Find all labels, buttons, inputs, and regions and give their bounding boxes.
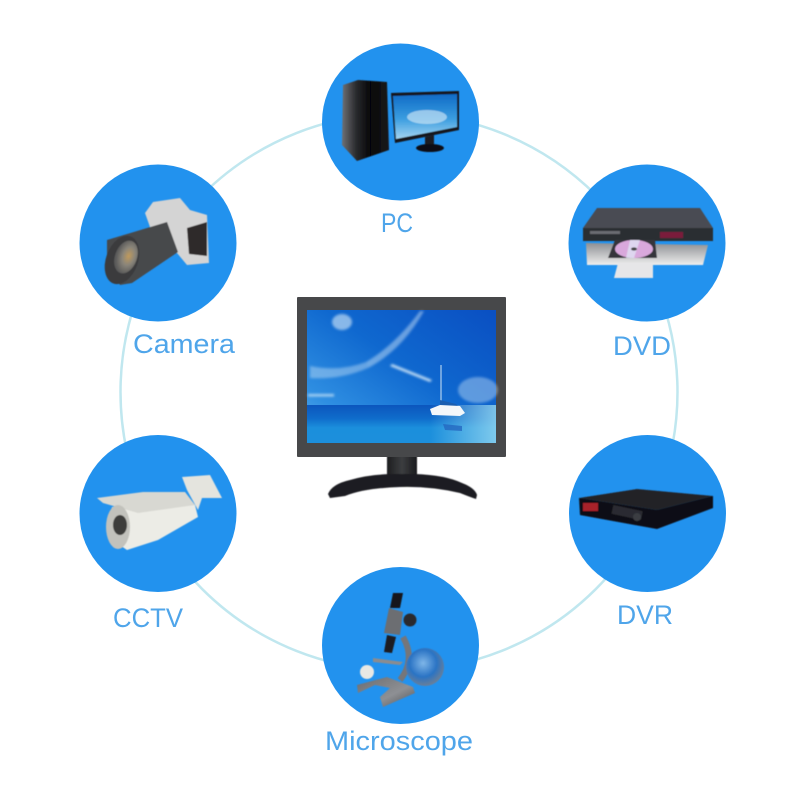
connecting ring (120, 114, 678, 670)
label: PC: PC (381, 208, 413, 238)
central monitor (297, 297, 506, 499)
monitor bezel (297, 297, 506, 457)
sailboat (430, 365, 465, 431)
label: CCTV: CCTV (113, 603, 183, 633)
node: CCTV (80, 435, 236, 633)
node: DVD (568, 164, 726, 361)
icon: DVD player (583, 208, 713, 278)
node: PC (322, 44, 479, 238)
node: Microscope (322, 567, 479, 756)
icon: DVR recorder (579, 489, 713, 529)
icon: microscope (357, 593, 444, 707)
label: DVD: DVD (613, 331, 671, 361)
icon: PC tower and monitor (342, 80, 459, 161)
clouds (308, 311, 498, 403)
label: Microscope: Microscope (325, 726, 473, 756)
node: DVR (569, 435, 726, 630)
node: Camera (80, 164, 236, 359)
monitor screen (307, 310, 498, 443)
icon: camera (98, 198, 209, 289)
monitor stand (328, 456, 477, 499)
icon: CCTV camera (97, 475, 222, 550)
label: Camera: Camera (133, 329, 236, 359)
label: DVR: DVR (617, 600, 673, 630)
